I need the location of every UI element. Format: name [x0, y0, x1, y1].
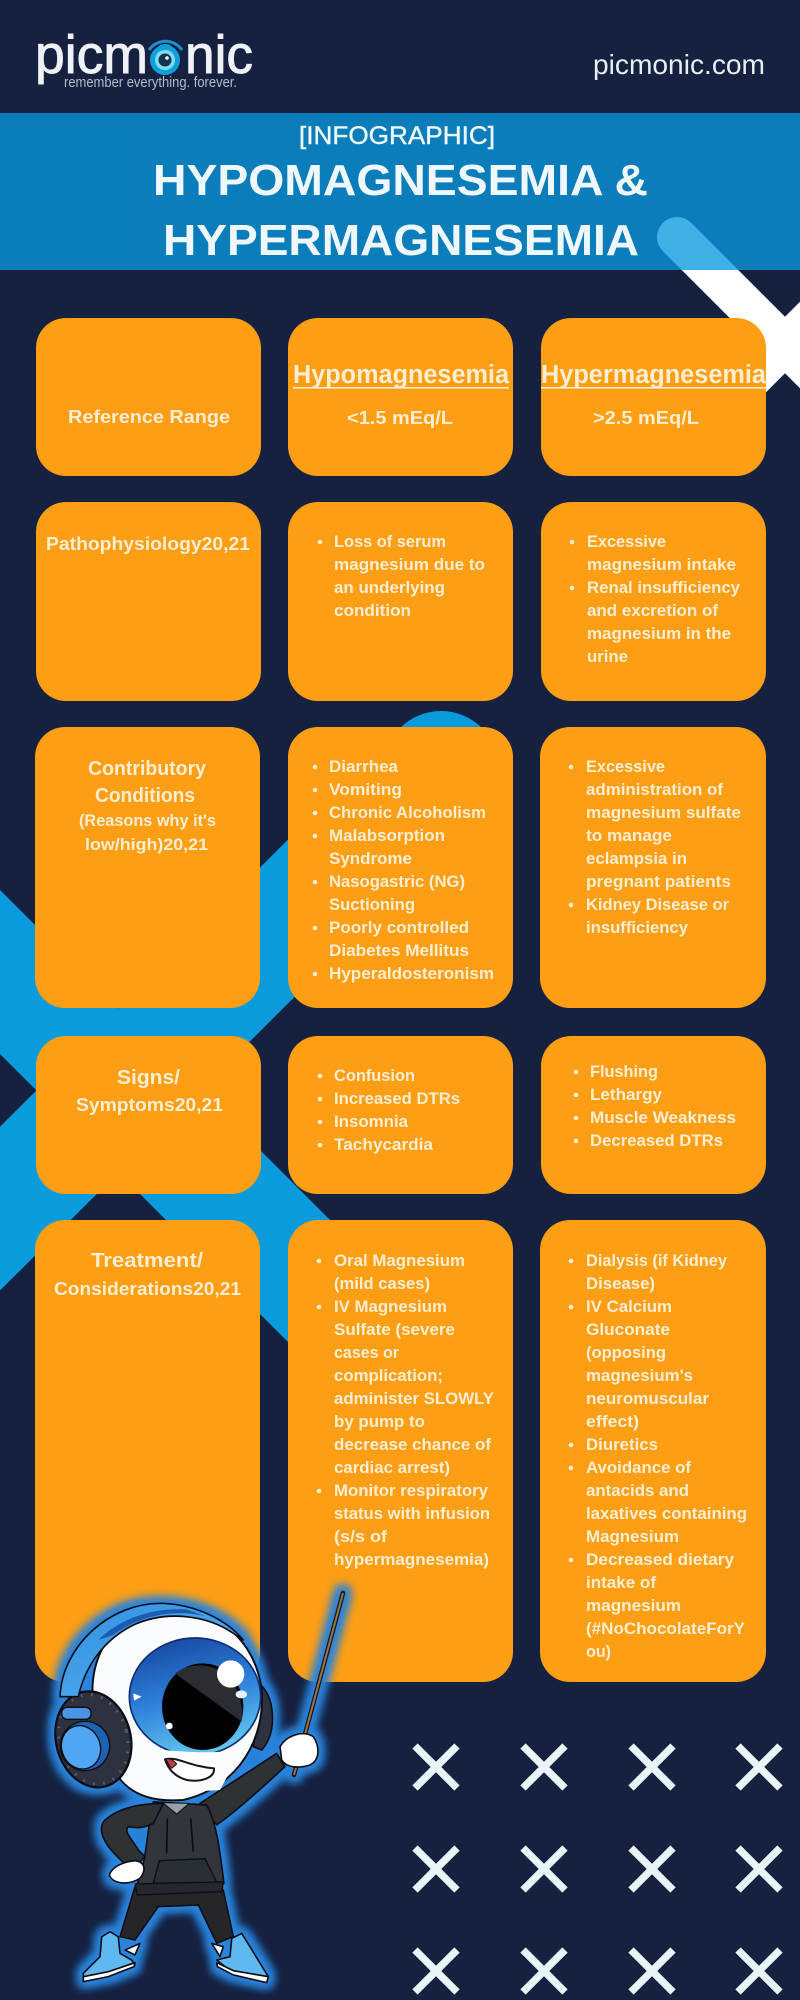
panel: hypomagnesemia contributory conditions: [288, 727, 513, 1008]
decorative grid of small white Xs: [415, 1746, 780, 1992]
bullet list: intake of: [586, 1573, 656, 1592]
bullet list: Poorly controlled: [329, 918, 469, 937]
pupil: [162, 1663, 243, 1750]
bullet list: Loss of serum: [334, 532, 446, 551]
left shoe: [83, 1932, 140, 1982]
bullet list: Malabsorption: [329, 826, 445, 845]
range value: <1.5 mEq/L: [347, 407, 453, 428]
bullet list: magnesium sulfate: [586, 803, 741, 822]
bullet list: Muscle Weakness: [590, 1108, 736, 1127]
column heading: Hypomagnesemia: [293, 361, 510, 389]
bullet list: an underlying: [334, 578, 445, 597]
head: [92, 1611, 262, 1800]
smile: [165, 1759, 214, 1781]
bullet list: urine: [587, 647, 628, 666]
panel: treatment and considerations label: [35, 1220, 260, 1682]
panel: hypomagnesemia treatment: [288, 1220, 513, 1682]
bullet list: [569, 757, 741, 937]
bullet list: Magnesium: [586, 1527, 679, 1546]
bullet list: status with infusion: [334, 1504, 490, 1523]
ear cup: [53, 1707, 117, 1778]
decorative large white X: [677, 237, 800, 453]
panel: hypomagnesemia pathophysiology: [288, 502, 513, 701]
near ear pad: [45, 1683, 141, 1796]
bullet list: Disease): [586, 1274, 655, 1293]
heading: Reference Range: [68, 406, 230, 427]
pointer stick: [294, 1593, 343, 1775]
legs: [120, 1887, 233, 1943]
main title: [153, 156, 648, 265]
bullet list: Vomiting: [329, 780, 402, 799]
bullet list: ou): [586, 1642, 611, 1661]
raised arm: [200, 1753, 285, 1825]
bullet list: administration of: [586, 780, 723, 799]
bullet list: Tachycardia: [334, 1135, 434, 1154]
bullet list: Chronic Alcoholism: [329, 803, 486, 822]
iris: [129, 1638, 261, 1755]
panel: hypermagnesemia range: [541, 318, 767, 476]
logo wordmark: [35, 25, 253, 85]
bullet list: Diuretics: [586, 1435, 658, 1454]
panel: signs and symptoms label: [36, 1036, 261, 1194]
heading: [54, 1250, 241, 1299]
panel: contributory conditions label: [35, 727, 260, 1008]
panel: hypermagnesemia pathophysiology: [541, 502, 766, 701]
bullet list: Monitor respiratory: [334, 1481, 489, 1500]
bullet list: Diarrhea: [329, 757, 399, 776]
panel: hypermagnesemia signs and symptoms: [541, 1036, 766, 1194]
heading: Considerations20,21: [54, 1278, 241, 1299]
card background: [541, 1036, 766, 1194]
headband: [60, 1603, 243, 1697]
bullet list: Confusion: [334, 1066, 415, 1085]
logo wordmark: picm: [35, 25, 148, 85]
bullet list: Oral Magnesium: [334, 1251, 465, 1270]
picmonic logo: [35, 25, 253, 91]
bullet list: IV Calcium: [586, 1297, 672, 1316]
bullet list: Syndrome: [329, 849, 412, 868]
icon: logo eye: [149, 41, 182, 75]
bullet list: pregnant patients: [586, 872, 731, 891]
bullet list: Hyperaldosteronism: [329, 964, 494, 983]
main title: HYPOMAGNESEMIA &: [153, 156, 648, 205]
panel: reference range label: [36, 318, 261, 476]
bullet list: Excessive: [587, 532, 666, 551]
bullet list: cardiac arrest): [334, 1458, 450, 1477]
column heading: Hypermagnesemia: [541, 361, 767, 389]
card background: [540, 727, 766, 1008]
bullet list: IV Magnesium: [334, 1297, 447, 1316]
card background: [35, 727, 260, 1008]
bullet list: decrease chance of: [334, 1435, 491, 1454]
heading: Treatment/: [91, 1250, 203, 1272]
bullet list: Diabetes Mellitus: [329, 941, 469, 960]
bullet list: magnesium: [586, 1596, 681, 1615]
bullet list: (opposing: [586, 1343, 666, 1362]
bullet list: [570, 532, 741, 666]
hands: [109, 1734, 318, 1883]
card background: [288, 727, 513, 1008]
card background: [288, 502, 513, 701]
bullet list: administer SLOWLY: [334, 1389, 495, 1408]
heading: [76, 1067, 223, 1115]
eyebrow: infographic: [INFOGRAPHIC]: [299, 122, 495, 150]
hoodie torso: [101, 1802, 224, 1895]
heading: [79, 758, 216, 854]
bullet list: [318, 532, 485, 620]
bullet list: Kidney Disease or: [586, 895, 729, 914]
range value: >2.5 mEq/L: [593, 407, 699, 428]
heading: Contributory: [88, 758, 207, 780]
panel: pathophysiology label: [36, 502, 261, 701]
bullet list: [569, 1251, 747, 1661]
bullet list: by pump to: [334, 1412, 425, 1431]
tagline: remember everything. forever.: [64, 75, 237, 91]
bullet list: Excessive: [586, 757, 665, 776]
card background: [540, 1220, 766, 1682]
bullet list: Increased DTRs: [334, 1089, 460, 1108]
heading: (Reasons why it's: [79, 811, 216, 830]
title banner: [0, 113, 800, 270]
bullet list: antacids and: [586, 1481, 689, 1500]
bullet list: effect): [586, 1412, 639, 1431]
card background: [288, 1220, 513, 1682]
banner background: [0, 113, 800, 270]
logo wordmark: o: [153, 25, 177, 85]
bullet list: condition: [334, 601, 411, 620]
bullet list: [317, 1251, 495, 1569]
heading: low/high)20,21: [85, 835, 208, 854]
bullet list: Decreased DTRs: [590, 1131, 723, 1150]
bullet list: eclampsia in: [586, 849, 687, 868]
bullet list: Suctioning: [329, 895, 415, 914]
bullet list: [318, 1066, 460, 1154]
card background: [35, 1220, 260, 1682]
panel: hypermagnesemia contributory conditions: [540, 727, 766, 1008]
bullet list: magnesium's: [586, 1366, 693, 1385]
right shoe: [212, 1933, 268, 1983]
logo wordmark: nic: [185, 25, 253, 85]
mascot: eyeball character with headphones and pointer: [45, 1593, 343, 1983]
bullet list: [313, 757, 494, 983]
website url: picmonic.com: [593, 49, 765, 80]
bullet list: Avoidance of: [586, 1458, 691, 1477]
heading: Symptoms20,21: [76, 1094, 223, 1115]
bullet list: (s/s of: [334, 1527, 387, 1546]
bullet list: (mild cases): [334, 1274, 430, 1293]
card background: [541, 318, 766, 476]
far ear pad: [253, 1683, 273, 1750]
bullet list: magnesium due to: [334, 555, 485, 574]
eye highlights: [217, 1660, 244, 1688]
bullet list: Sulfate (severe: [334, 1320, 455, 1339]
card background: [288, 318, 513, 476]
bullet list: hypermagnesemia): [334, 1550, 489, 1569]
heading: Conditions: [95, 785, 195, 807]
decorative large blue X: [0, 767, 441, 1413]
main title: HYPERMAGNESEMIA: [163, 216, 639, 265]
bullet list: Insomnia: [334, 1112, 409, 1131]
bullet list: magnesium intake: [587, 555, 736, 574]
bullet list: cases or: [334, 1343, 399, 1362]
panel: hypermagnesemia treatment: [540, 1220, 766, 1682]
bullet list: Nasogastric (NG): [329, 872, 465, 891]
bullet list: insufficiency: [586, 918, 689, 937]
bullet list: [574, 1062, 736, 1150]
card background: [36, 318, 261, 476]
bullet list: to manage: [586, 826, 672, 845]
bullet list: magnesium in the: [587, 624, 731, 643]
bullet list: Decreased dietary: [586, 1550, 735, 1569]
card background: [36, 502, 261, 701]
card background: [36, 1036, 261, 1194]
lower face: [141, 1747, 242, 1794]
bullet list: neuromuscular: [586, 1389, 709, 1408]
bullet list: laxatives containing: [586, 1504, 747, 1523]
bullet list: Lethargy: [590, 1085, 663, 1104]
panel: hypomagnesemia range: [288, 318, 513, 476]
bullet list: (#NoChocolateForY: [586, 1619, 746, 1638]
card background: [541, 502, 766, 701]
heading: Signs/: [117, 1067, 180, 1089]
bullet list: and excretion of: [587, 601, 718, 620]
bullet list: complication;: [334, 1366, 443, 1385]
bullet list: Renal insufficiency: [587, 578, 741, 597]
eye: [129, 1638, 261, 1755]
heading: Pathophysiology20,21: [46, 533, 250, 554]
panel: hypomagnesemia signs and symptoms: [288, 1036, 513, 1194]
card background: [288, 1036, 513, 1194]
bullet list: Dialysis (if Kidney: [586, 1251, 728, 1270]
bullet list: Gluconate: [586, 1320, 670, 1339]
bullet list: Flushing: [590, 1062, 658, 1081]
